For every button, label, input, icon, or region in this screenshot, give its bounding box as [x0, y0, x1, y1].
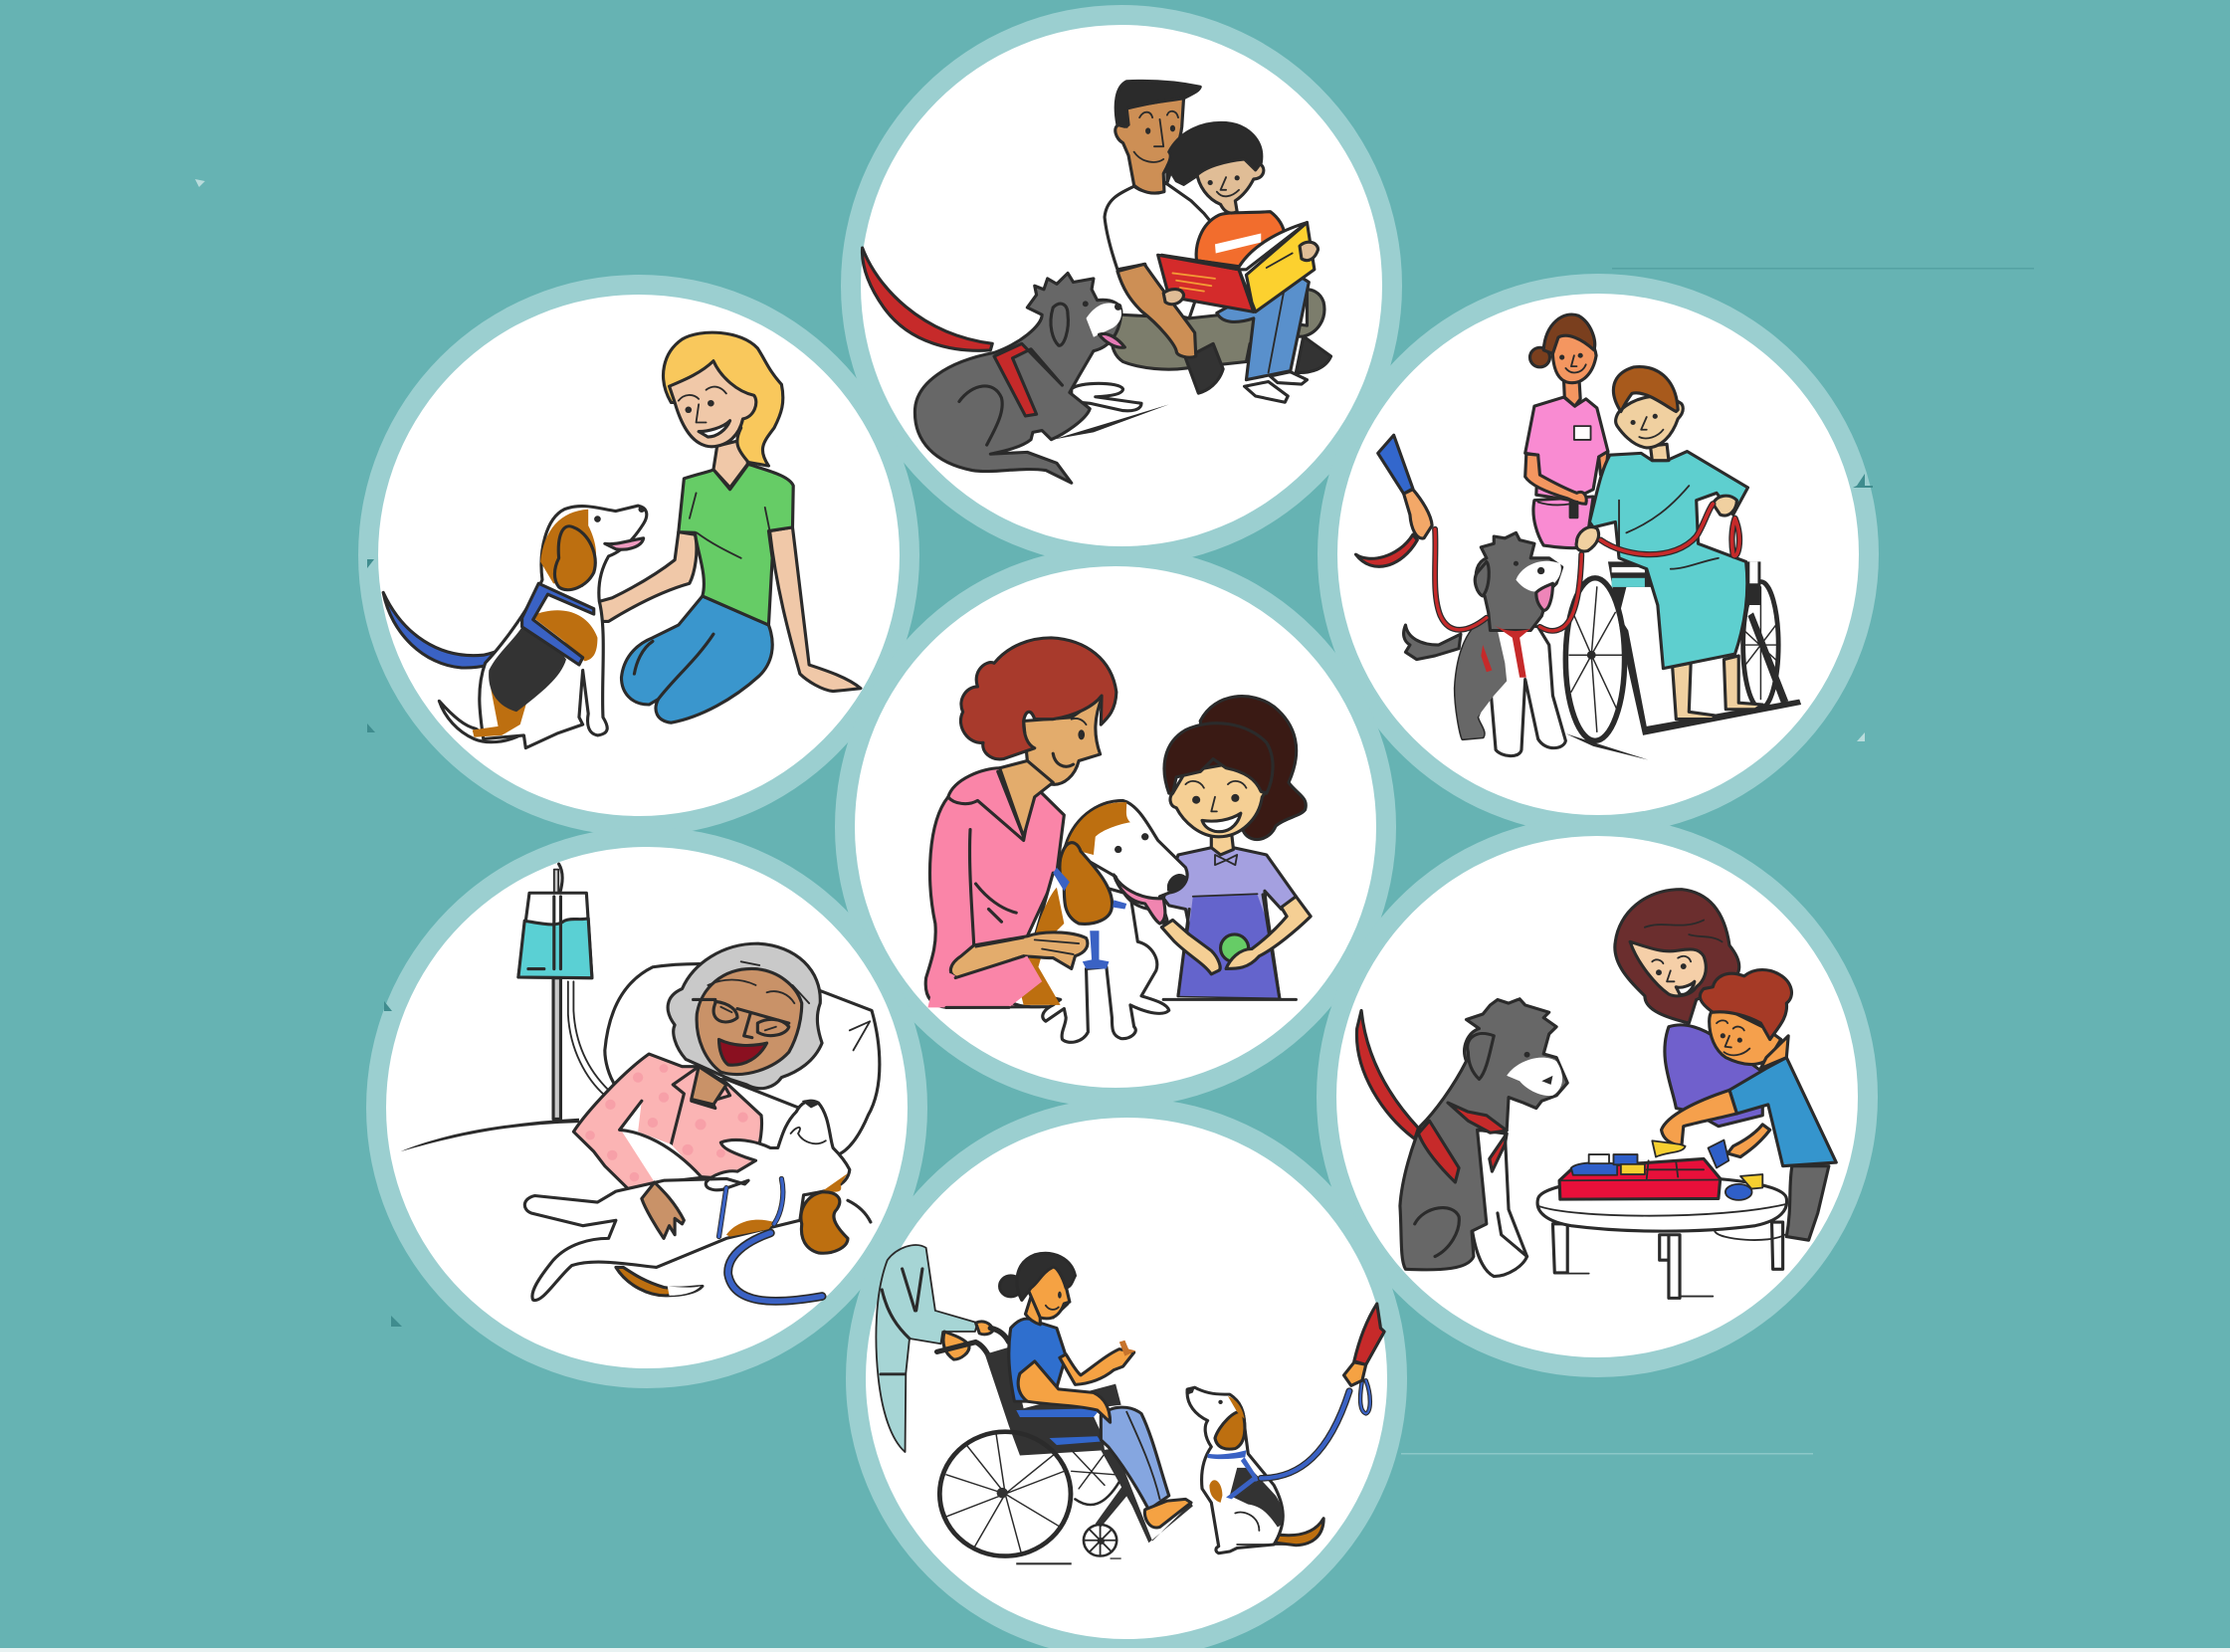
- beagle on its back: [524, 1100, 871, 1301]
- panel: woman in wheelchair with beagle: [876, 1245, 1384, 1564]
- grey hair: [668, 943, 822, 1089]
- doctor's hands: [943, 1322, 993, 1359]
- patient's arms: [1018, 1341, 1135, 1422]
- pink pyjamas: [573, 1054, 762, 1198]
- blue leash: [728, 1233, 822, 1301]
- patient's red leash: [1601, 504, 1739, 556]
- patient's head: [1000, 1253, 1075, 1325]
- man's shoes: [1185, 336, 1331, 393]
- grey dog lying down: [914, 273, 1169, 483]
- boy's head: [1167, 122, 1264, 213]
- beagle: [995, 800, 1187, 1042]
- boy's blue shirt: [1729, 1058, 1836, 1166]
- patient's blue top: [1009, 1319, 1066, 1401]
- girl's hair: [1200, 697, 1306, 840]
- boy's orange shirt: [1196, 212, 1285, 268]
- mother's hair: [1615, 890, 1739, 1023]
- neck: [713, 439, 747, 488]
- woman's pink jacket: [925, 768, 1064, 1007]
- boy's sneakers: [1245, 372, 1307, 402]
- handler's red sleeve: [1354, 1304, 1384, 1364]
- white circle interiors: [378, 25, 1859, 1639]
- circle rings: [358, 5, 1879, 1652]
- loose leash end: [1356, 534, 1417, 566]
- beagle sitting: [439, 506, 647, 748]
- open book: [1158, 223, 1315, 311]
- blue leash: [383, 592, 522, 668]
- boy's head: [1700, 969, 1791, 1069]
- boy's jeans: [1217, 272, 1309, 380]
- woman's hand on dog: [950, 932, 1088, 978]
- boy's arms: [1662, 1090, 1770, 1157]
- doctor's coat: [876, 1245, 977, 1452]
- red leash: [862, 248, 992, 350]
- dog leash: [1435, 529, 1581, 631]
- girl's arms and green ball: [1161, 897, 1311, 974]
- IV bag: [518, 893, 592, 978]
- pillow: [605, 963, 880, 1155]
- blue leash: [1261, 1380, 1370, 1478]
- man's arm: [1117, 264, 1196, 357]
- panel: elderly patient in bed with beagle: [401, 864, 880, 1301]
- patient's face: [694, 961, 809, 1074]
- patient's trousers: [1101, 1407, 1169, 1510]
- helper's blue sleeve: [1378, 435, 1413, 494]
- patient's foot: [1144, 1499, 1191, 1528]
- wheelchair back wheel: [1742, 581, 1779, 709]
- mother's face: [1630, 921, 1723, 996]
- blue jeans: [621, 596, 772, 723]
- red leash: [1356, 1010, 1418, 1138]
- helper's hand: [1404, 490, 1432, 538]
- man's crossed legs: [1112, 290, 1324, 369]
- hands on the book: [1163, 242, 1318, 305]
- panel: patient in wheelchair with nurse and dog: [1356, 314, 1801, 760]
- girl's head: [1164, 723, 1273, 855]
- front arm: [599, 532, 697, 621]
- panel: father and son reading with grey dog: [862, 81, 1331, 483]
- patient's hand on dog: [642, 1182, 684, 1238]
- woman's face: [670, 361, 756, 447]
- woman's head: [960, 638, 1116, 837]
- grey dog sitting: [1400, 999, 1567, 1277]
- mother's purple top: [1665, 1025, 1762, 1127]
- grey dog standing: [1404, 532, 1565, 756]
- red toy box: [1559, 1158, 1721, 1199]
- panel: blonde woman with beagle: [383, 332, 861, 748]
- boy's legs: [1786, 1166, 1829, 1240]
- wheelchair front wheel: [1565, 578, 1625, 740]
- back arm and hand: [770, 527, 861, 692]
- patient in gown: [1576, 367, 1747, 669]
- girl's dress: [1163, 848, 1296, 999]
- table: [1537, 1177, 1787, 1298]
- bed line: [401, 1119, 579, 1151]
- man's head: [1115, 81, 1200, 193]
- coloured blocks: [1571, 1140, 1762, 1200]
- IV tube: [568, 981, 609, 1096]
- handler's hand: [1343, 1362, 1366, 1385]
- beagle: [1185, 1387, 1323, 1553]
- nurse: [1525, 314, 1608, 548]
- green shirt: [679, 464, 793, 625]
- panel: mother, daughter and beagle in the centre: [925, 638, 1311, 1042]
- small background marks: [195, 179, 2034, 1455]
- panel: mother and boy playing with blocks beside grey dog: [1356, 890, 1836, 1298]
- bottom edge strip: [0, 1648, 2230, 1652]
- hair: [664, 332, 783, 466]
- patient's feet and legs: [1673, 656, 1762, 720]
- wheelchair frame: [1565, 561, 1801, 760]
- IV pole: [553, 864, 562, 1119]
- wheelchair: [937, 1329, 1193, 1564]
- man's white shirt: [1105, 183, 1219, 318]
